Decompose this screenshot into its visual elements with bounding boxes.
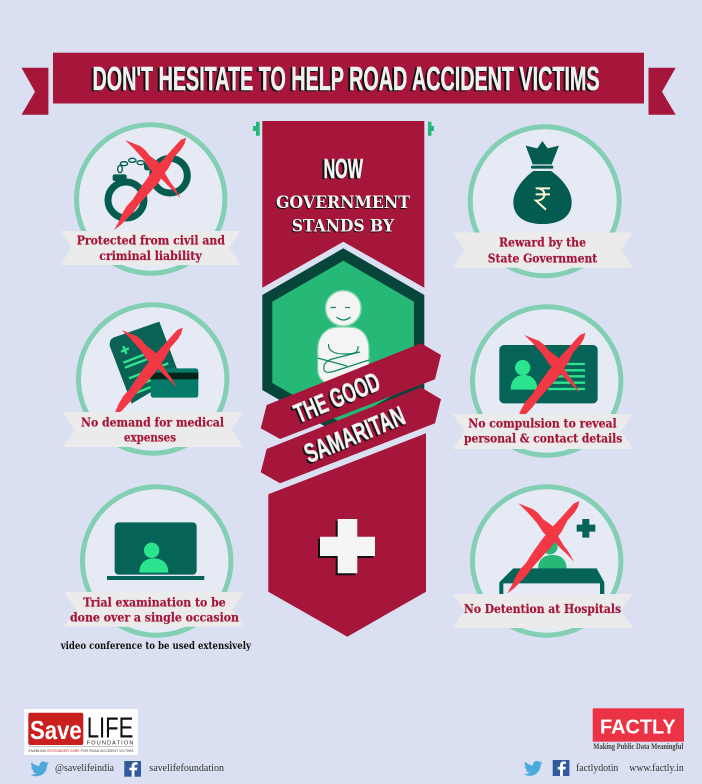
caption text: done over a single occasion: [70, 610, 239, 625]
government stands by text: STANDS BY: [292, 216, 395, 236]
caption text: [488, 235, 597, 266]
right tab: [428, 122, 434, 136]
icon: facebook factly: [553, 760, 569, 776]
icon: good samaritan figure: [318, 290, 369, 388]
badge circle: [82, 487, 231, 635]
government stands by text: [276, 193, 410, 236]
icon: handcuffs: [108, 158, 187, 218]
caption text: criminal liability: [99, 248, 202, 263]
government stands by text: GOVERNMENT: [276, 193, 410, 213]
ribbon: samaritan: [261, 387, 441, 483]
left tab: [253, 122, 260, 136]
savelife facebook name: savelifefoundation: [149, 762, 224, 774]
savelife logo: [24, 709, 138, 755]
caption text: Reward by the: [499, 235, 586, 250]
caption text: personal & contact details: [464, 431, 622, 446]
caption ribbon: [453, 232, 633, 268]
panel: civil and criminal liability: [60, 125, 241, 273]
caption text: No demand for medical: [81, 415, 224, 430]
icon: bill and card: [110, 322, 198, 404]
savelife logo: LIFE: [87, 712, 133, 744]
ribbon: samaritan: SAMARITAN: [300, 401, 409, 469]
panel: reward: [453, 127, 633, 276]
caption text: [77, 232, 225, 263]
caption ribbon: [453, 414, 633, 449]
caption text: No compulsion to reveal: [468, 415, 617, 430]
caption text: State Government: [488, 251, 597, 266]
video conference note: video conference to be used extensively: [60, 641, 252, 652]
caption ribbon: [60, 231, 241, 265]
title banner: [22, 53, 676, 115]
ribbon: the good: THE GOOD: [290, 367, 384, 429]
icon: red cross mark: [114, 138, 186, 230]
badge circle: [78, 305, 227, 453]
caption text: Trial examination to be: [83, 595, 226, 610]
caption text: Protected from civil and: [77, 232, 225, 247]
icon: twitter savelife: [30, 761, 49, 776]
left ribbon tail: [22, 68, 48, 115]
caption text: No Detention at Hospitals: [464, 601, 621, 616]
factly logo: [593, 708, 684, 742]
samaritan ribbons: [261, 343, 441, 483]
icon: video conference laptop: [107, 522, 204, 580]
caption text: [70, 595, 239, 625]
caption text: expenses: [124, 430, 176, 445]
panel: detention at hospitals: [453, 487, 633, 635]
savelife twitter handle: @savelifeindia: [55, 762, 114, 774]
bottom maroon panel: [268, 433, 426, 637]
factly logo: FACTLY: [600, 716, 676, 738]
title bar: [53, 53, 644, 104]
icon: facebook savelife: [124, 761, 141, 777]
savelife logo: Save: [30, 715, 82, 745]
panel: trial examination: [60, 487, 252, 652]
icon: red cross mark: [111, 328, 183, 420]
panel: medical expenses: [63, 305, 243, 453]
icon: medical cross: [318, 519, 375, 575]
now text: NOW: [324, 153, 363, 184]
badge circle: [472, 487, 621, 635]
caption ribbon: [453, 594, 633, 628]
badge circle: [472, 307, 621, 455]
badge circle: [76, 125, 225, 273]
panel: personal details: [453, 307, 633, 455]
caption ribbon: [64, 592, 244, 627]
icon: twitter factly: [524, 761, 542, 776]
caption text: [81, 415, 224, 445]
ribbon: the good: [261, 343, 441, 439]
icon: id card: [499, 345, 598, 403]
caption text: [464, 415, 622, 446]
savelife logo: FOUNDATION: [87, 740, 133, 746]
badge circle: [470, 127, 619, 276]
panel: centre column: [253, 121, 441, 637]
factly website: www.factly.in: [629, 762, 684, 774]
savelife red block: [28, 713, 83, 745]
top maroon panel: [262, 121, 424, 288]
right ribbon tail: [648, 68, 676, 115]
icon: red cross mark: [507, 501, 579, 593]
icon: red cross mark: [513, 333, 585, 425]
icon: person at hospital desk: [499, 519, 604, 594]
factly facebook name: factlydotin: [576, 762, 619, 774]
icon: money bag: [513, 141, 572, 224]
savelife logo: ENABLING BYSTANDER CARE FOR ROAD ACCIDENT VICTIMS: [28, 749, 134, 753]
hexagon: [262, 248, 424, 437]
caption ribbon: [63, 412, 243, 447]
